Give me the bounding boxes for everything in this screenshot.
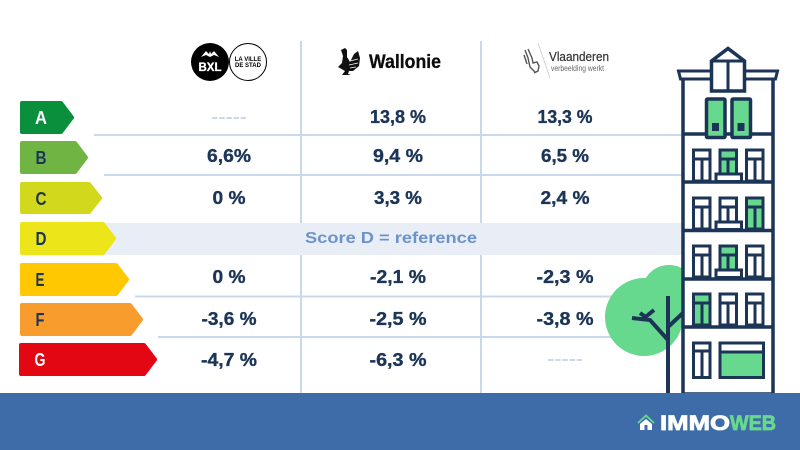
values: Brussels column: 0 % <box>212 267 246 287</box>
logo: Vlaanderen: verbeelding werkt <box>551 64 605 73</box>
floor 1 windows <box>694 150 763 182</box>
label G <box>21 345 155 374</box>
values: Wallonie column: 3,3 % <box>374 188 422 208</box>
values: Vlaanderen column: 13,3 % <box>538 107 592 127</box>
values: Vlaanderen column: -2,3 % <box>536 267 594 287</box>
logo: Brussels: BXL <box>198 62 222 74</box>
floor 4 windows <box>694 294 763 325</box>
values: Vlaanderen column: -3,8 % <box>536 309 594 329</box>
logo: Brussels: LA VILLE <box>235 57 261 63</box>
values: Wallonie column: -2,1 % <box>370 267 426 287</box>
values: Vlaanderen column <box>536 107 594 360</box>
logo: Immoweb: IMMO <box>660 412 730 435</box>
values: Brussels column <box>201 118 257 370</box>
label E: E <box>36 270 44 290</box>
logo: Brussels <box>191 43 266 81</box>
floor lines <box>683 134 773 327</box>
energy labels A to G <box>21 103 155 374</box>
values: Wallonie column <box>370 107 426 370</box>
values: Wallonie column: -6,3 % <box>370 350 426 370</box>
values: Wallonie column: 13,8 % <box>370 107 426 127</box>
label C: C <box>36 189 46 209</box>
logo: Brussels: DE STAD <box>235 63 262 69</box>
footer bar <box>0 393 800 450</box>
label C <box>22 184 100 212</box>
logo: Wallonie: Wallonie <box>369 51 441 73</box>
logo: Wallonie <box>338 48 441 75</box>
floor 3 windows <box>694 246 763 278</box>
roof cornice <box>678 71 778 79</box>
ground floor windows <box>694 343 764 378</box>
floor 2 windows <box>694 198 763 230</box>
label A <box>22 103 72 132</box>
logo: Immoweb: WEB <box>730 412 776 435</box>
values: Brussels column: -4,7 % <box>201 350 257 370</box>
values: Brussels column: 0 % <box>212 188 246 208</box>
label D: D <box>36 229 46 249</box>
dormer <box>712 48 744 91</box>
illustration: tree <box>605 265 696 393</box>
band: score D reference <box>105 223 683 255</box>
values: Brussels column: -3,6 % <box>202 309 256 329</box>
values: Vlaanderen column: 2,4 % <box>540 188 590 208</box>
label G: G <box>34 350 46 370</box>
band: score D reference: Score D = reference <box>305 230 477 247</box>
values: Vlaanderen column: 6,5 % <box>541 146 589 166</box>
illustration: building <box>678 48 778 394</box>
logo: Immoweb <box>638 412 776 435</box>
top floor green windows <box>706 99 750 138</box>
label F: F <box>36 310 44 330</box>
label F <box>22 305 141 334</box>
values: Wallonie column: -2,5 % <box>370 309 426 329</box>
label B: B <box>36 148 46 168</box>
table grid lines <box>94 41 683 393</box>
logo: Vlaanderen <box>524 43 609 78</box>
label A: A <box>35 108 47 128</box>
label B <box>22 143 86 172</box>
label E <box>22 265 127 294</box>
values: Wallonie column: 9,4 % <box>373 146 423 166</box>
label D <box>22 224 114 253</box>
values: Brussels column: 6,6% <box>207 146 251 166</box>
logo: Vlaanderen: Vlaanderen <box>549 50 609 64</box>
facade <box>683 78 773 394</box>
